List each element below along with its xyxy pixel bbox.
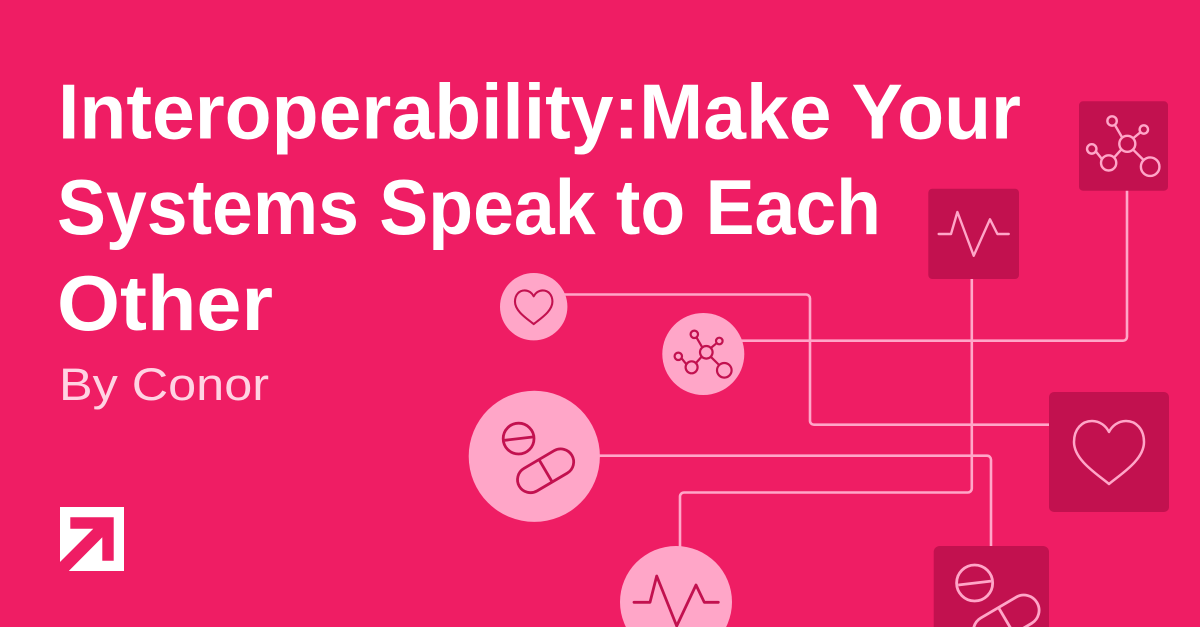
node: pills circle: [469, 391, 600, 522]
connector lines: [560, 190, 1127, 547]
node: network square: [1079, 101, 1168, 191]
node: heart circle: [500, 273, 567, 340]
byline: By Conor: [59, 359, 269, 410]
title: Systems Speak to Each: [57, 163, 881, 251]
node: pulse square: [928, 189, 1019, 279]
node: network circle: [662, 313, 744, 395]
node: pills square: [934, 546, 1049, 627]
title: Interoperability:Make Your: [58, 67, 1021, 155]
title: Other: [57, 259, 273, 347]
logo: arrow in white square: [60, 507, 124, 571]
node: pulse circle: [620, 546, 732, 627]
node: heart square: [1049, 392, 1169, 512]
title: [57, 67, 1021, 347]
